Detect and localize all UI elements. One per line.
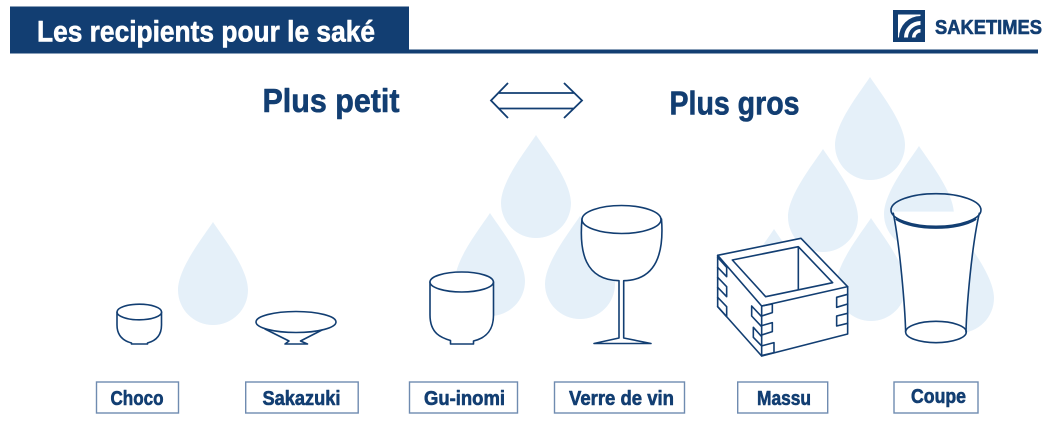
vessel: choco (117, 304, 162, 344)
background water drops (178, 77, 994, 333)
label: Sakazuki (246, 382, 358, 413)
label: Gu-inomi (410, 382, 518, 413)
logo: SAKETIMES (893, 10, 1042, 42)
heading: smaller: Plus petit (262, 82, 400, 119)
vessel: gu-inomi (430, 272, 494, 344)
vessel: wine glass (581, 206, 662, 344)
double arrow (491, 83, 582, 118)
label: Coupe: Coupe (911, 386, 966, 408)
label: Verre de vin (554, 382, 684, 413)
label: Choco (96, 382, 178, 413)
heading: larger: Plus gros (670, 84, 800, 122)
label: Massu (738, 382, 828, 413)
label: Coupe (894, 382, 978, 413)
title banner: Les recipients pour le saké (37, 16, 375, 48)
label: Choco: Choco (110, 388, 164, 410)
label: Gu-inomi: Gu-inomi (424, 388, 505, 410)
label: Sakazuki: Sakazuki (262, 388, 340, 410)
vessel: sakazuki (256, 312, 336, 344)
label: Massu: Massu (757, 388, 811, 410)
logo: SAKETIMES: SAKETIMES (935, 17, 1042, 39)
label: Verre de vin: Verre de vin (569, 388, 674, 410)
title banner (10, 6, 1038, 54)
vessel: massu (718, 238, 848, 356)
vessel: coupe (891, 194, 981, 343)
